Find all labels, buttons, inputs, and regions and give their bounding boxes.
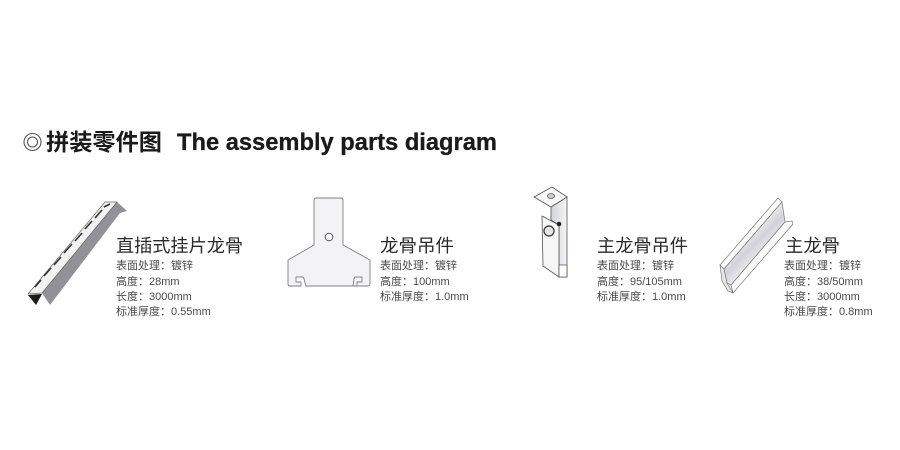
spec text: 标准厚度：0.8mm (784, 304, 873, 318)
spec text: 高度：100mm (380, 274, 450, 288)
spec text: 表面处理：镀锌 (380, 258, 457, 272)
panel: slotted keel (28, 202, 243, 318)
part name: 直插式挂片龙骨 (116, 236, 243, 256)
icon: double circle bullet (24, 134, 41, 150)
part name: 龙骨吊件 (380, 236, 454, 256)
spec text: 长度：3000mm (784, 289, 860, 303)
heading: english: The assembly parts diagram (177, 129, 497, 156)
spec text: 标准厚度：1.0mm (380, 289, 469, 303)
title (24, 129, 497, 156)
icon: slotted keel (28, 202, 127, 305)
icon: keel hanger (288, 198, 370, 286)
spec text: 高度：95/105mm (597, 274, 682, 288)
spec text (784, 258, 873, 318)
heading: chinese: 拼装零件图 (46, 129, 162, 155)
panel: main keel (720, 198, 873, 318)
spec text: 长度：3000mm (116, 289, 192, 303)
spec text: 表面处理：镀锌 (116, 258, 193, 272)
part name: 主龙骨吊件 (597, 236, 688, 256)
spec text: 表面处理：镀锌 (784, 258, 861, 272)
spec text (116, 258, 211, 318)
spec text: 标准厚度：0.55mm (116, 304, 211, 318)
panel: main keel hanger (534, 187, 688, 303)
spec text (597, 258, 686, 303)
icon: main keel channel (720, 198, 793, 293)
panel: keel hanger (288, 198, 469, 303)
icon: main keel hanger (534, 187, 567, 277)
spec text (380, 258, 469, 303)
spec text: 高度：28mm (116, 274, 180, 288)
spec text: 高度：38/50mm (784, 274, 863, 288)
spec text: 表面处理：镀锌 (597, 258, 674, 272)
spec text: 标准厚度：1.0mm (597, 289, 686, 303)
part name: 主龙骨 (785, 236, 840, 256)
